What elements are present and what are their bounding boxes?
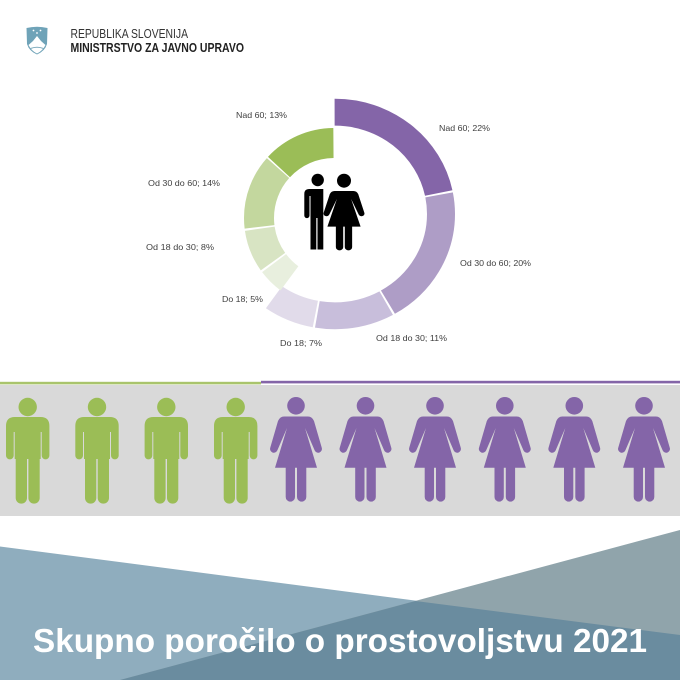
label: men 18 to 30: Od 18 do 30; 8% — [146, 242, 214, 252]
title: Skupno poročilo o prostovoljstvu 2021 — [33, 622, 647, 659]
label: men under 18: Do 18; 5% — [222, 294, 263, 304]
green rule — [0, 382, 261, 384]
men pictograms — [6, 398, 257, 504]
purple rule — [261, 381, 680, 383]
label: women over 60: Nad 60; 22% — [439, 123, 490, 133]
icon: man 2 — [75, 398, 119, 504]
icon: man 3 — [145, 398, 188, 504]
text: Ministrstvo za javno upravo: MINISTRSTVO ZA JAVNO UPRAVO — [70, 41, 244, 55]
band background — [0, 385, 680, 516]
icon: man 1 — [6, 398, 49, 504]
outer ring: women — [229, 112, 441, 316]
label: women under 18: Do 18; 7% — [280, 338, 322, 348]
footer banner — [0, 530, 680, 680]
icon: man and woman in the centre — [304, 174, 365, 250]
label: men over 60: Nad 60; 13% — [236, 110, 287, 120]
icon: man 4 — [214, 398, 257, 504]
icon: woman 2 — [340, 397, 391, 502]
icon: woman 6 — [618, 397, 670, 502]
donut chart: volunteers by gender and age — [146, 110, 531, 348]
icon: woman 5 — [548, 397, 600, 502]
label: men 30 to 60: Od 30 do 60; 14% — [148, 178, 220, 188]
left light-blue shape — [0, 546, 680, 680]
icon: Slovenian coat of arms shield — [26, 27, 48, 54]
pictogram band: 4 men and 6 women — [0, 381, 680, 516]
label: women 18 to 30: Od 18 do 30; 11% — [376, 333, 447, 343]
inner ring: men — [259, 143, 409, 293]
chart labels — [146, 110, 531, 348]
right grey-blue shape — [120, 530, 680, 680]
text: Republika Slovenija: REPUBLIKA SLOVENIJA — [70, 27, 189, 41]
women pictograms — [270, 397, 670, 502]
icon: woman 1 — [270, 397, 322, 502]
header: ministry logo and name — [26, 27, 244, 55]
label: women 30 to 60: Od 30 do 60; 20% — [460, 258, 531, 268]
overlap of the two shapes — [120, 601, 680, 680]
icon: woman 3 — [409, 397, 461, 502]
icon: woman 4 — [479, 397, 531, 502]
